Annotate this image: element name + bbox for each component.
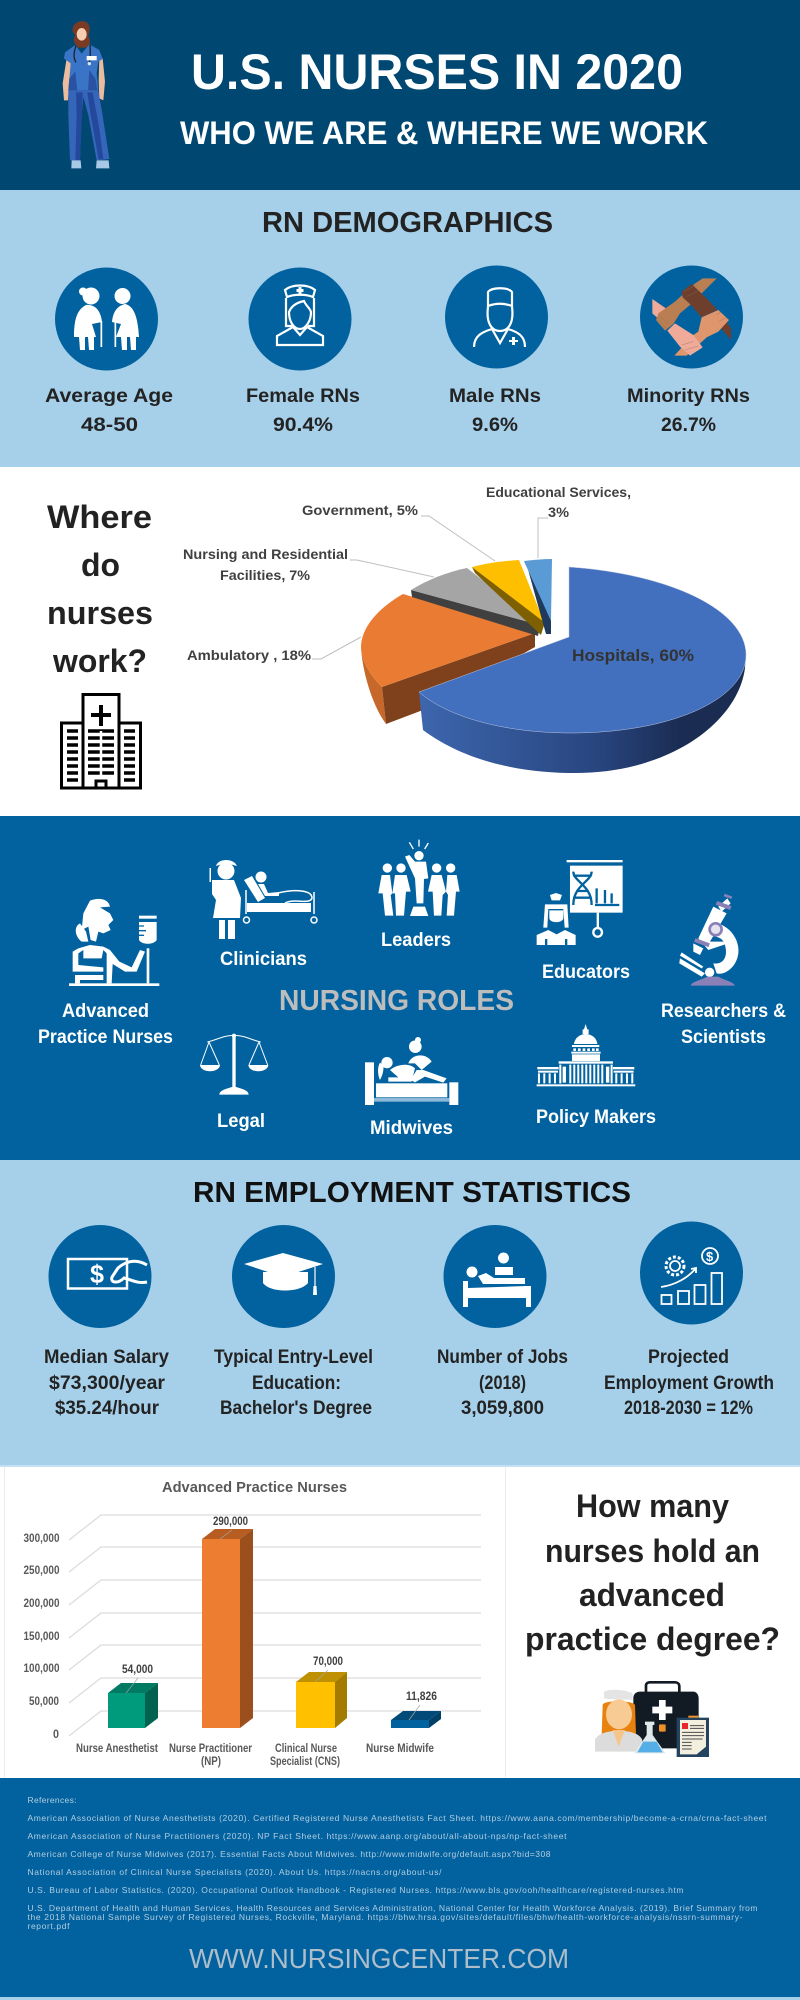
heading: RN DEMOGRAPHICS bbox=[262, 207, 553, 239]
leader lines bbox=[312, 516, 548, 659]
pie chart bbox=[183, 484, 746, 773]
stat: projected growth bbox=[604, 1347, 774, 1419]
title: U.S. NURSES IN 2020 bbox=[191, 44, 683, 100]
heading: advanced practice degree question bbox=[525, 1488, 780, 1657]
x axis labels: Nurse Practitioner bbox=[169, 1741, 252, 1755]
subtitle: WHO WE ARE & WHERE WE WORK bbox=[180, 115, 708, 151]
bar: nurse anesthetist: 54,000 bbox=[122, 1662, 153, 1676]
role: advanced practice nurses: Practice Nurses bbox=[38, 1027, 173, 1048]
bar: nurse anesthetist bbox=[108, 1662, 158, 1728]
x axis labels: (NP) bbox=[201, 1754, 221, 1768]
bar: nurse practitioner bbox=[202, 1514, 253, 1728]
icon: female nurse bbox=[248, 268, 352, 370]
stat: projected growth: Employment Growth bbox=[604, 1373, 774, 1394]
references list: U.S. Department of Health and Human Services, Health Resources and Services Administration, National Center for Health Workforce Analysis. (2019). Brief Summary from bbox=[28, 1903, 757, 1913]
heading: NURSING ROLES bbox=[279, 985, 514, 1017]
role: researchers and scientists: Researchers & bbox=[661, 1001, 786, 1022]
label: minority RNs bbox=[627, 386, 750, 436]
slice: ambulatory bbox=[361, 594, 535, 724]
heading: do bbox=[81, 547, 120, 583]
role: leaders: Leaders bbox=[381, 930, 451, 951]
label: educational services: Educational Services, bbox=[486, 484, 631, 500]
heading: nurses bbox=[47, 595, 153, 631]
icon: nurse with medical kit bbox=[595, 1682, 709, 1757]
label: average age: 48-50 bbox=[81, 415, 138, 436]
heading: Where bbox=[47, 499, 152, 535]
role: legal: Legal bbox=[217, 1111, 265, 1132]
icon: nurse with IV bbox=[69, 899, 159, 986]
role: researchers and scientists: Scientists bbox=[681, 1027, 766, 1048]
y axis: 150,000 bbox=[24, 1629, 60, 1643]
stat: median salary: Median Salary bbox=[44, 1347, 169, 1368]
label: minority RNs: Minority RNs bbox=[627, 386, 750, 407]
role: advanced practice nurses bbox=[38, 899, 173, 1048]
chart title: Advanced Practice Nurses bbox=[162, 1479, 347, 1496]
label: nursing and residential: Nursing and Residential bbox=[183, 546, 348, 562]
label: ambulatory: Ambulatory , 18% bbox=[187, 647, 312, 663]
panel: RN demographics bbox=[0, 190, 800, 467]
icon: salary bbox=[48, 1225, 152, 1328]
stat: entry-level education: Typical Entry-Level bbox=[214, 1347, 373, 1368]
role: researchers and scientists bbox=[661, 894, 786, 1048]
references list: References: bbox=[28, 1795, 76, 1805]
icon: nurse figure bbox=[63, 21, 109, 168]
stat: projected growth: 2018-2030 = 12% bbox=[624, 1398, 753, 1419]
bar: clinical nurse specialist: 70,000 bbox=[313, 1654, 343, 1668]
heading: advanced practice degree question: nurses hold an bbox=[545, 1533, 760, 1569]
icon: growth chart: $ bbox=[706, 1249, 714, 1264]
references list: report.pdf bbox=[28, 1921, 70, 1931]
x axis labels: Specialist (CNS) bbox=[270, 1754, 340, 1768]
references list: American Association of Nurse Practitioners (2020). NP Fact Sheet. https://www.aanp.org/about/all-about-nps/np-fact-sheet bbox=[28, 1831, 567, 1841]
slice: government bbox=[472, 560, 545, 635]
stat: entry-level education bbox=[214, 1347, 373, 1419]
icon: male nurse bbox=[445, 266, 548, 368]
website: WWW.NURSINGCENTER.COM bbox=[189, 1943, 569, 1974]
label: educational services: 3% bbox=[548, 504, 570, 520]
label: nursing and residential bbox=[183, 546, 348, 583]
role: midwives bbox=[365, 1037, 458, 1139]
label: male RNs bbox=[449, 386, 541, 436]
stat: median salary bbox=[44, 1347, 169, 1419]
bar: nurse midwife bbox=[391, 1689, 441, 1728]
icon: graduation cap bbox=[232, 1225, 335, 1328]
icon: midwife and patient bbox=[365, 1037, 458, 1105]
references list: American Association of Nurse Anesthetists (2020). Certified Registered Nurse Anesthetists Fact Sheet. https://www.aana.com/membership/become-a-crna/crna-fact-sheet bbox=[28, 1813, 767, 1823]
y axis: 250,000 bbox=[24, 1563, 60, 1577]
panel: references footer bbox=[0, 1778, 800, 2000]
panel: RN employment statistics bbox=[0, 1160, 800, 1465]
stat: number of jobs: Number of Jobs bbox=[437, 1347, 568, 1368]
references list bbox=[28, 1795, 767, 1931]
role: policy makers: Policy Makers bbox=[536, 1107, 656, 1128]
icon: leader group bbox=[378, 840, 460, 916]
stat: entry-level education: Education: bbox=[252, 1373, 341, 1394]
bar: nurse practitioner: 290,000 bbox=[213, 1514, 248, 1528]
stat: number of jobs: 3,059,800 bbox=[461, 1398, 544, 1419]
panel: where do nurses work bbox=[0, 467, 800, 816]
stat: projected growth: Projected bbox=[648, 1347, 729, 1368]
icon: nurse with patient bbox=[210, 860, 311, 939]
icon: educator with board bbox=[537, 860, 623, 945]
label: government: Government, 5% bbox=[302, 502, 419, 518]
role: educators: Educators bbox=[542, 962, 630, 983]
bar: clinical nurse specialist bbox=[296, 1654, 347, 1728]
bar: nurse midwife: 11,826 bbox=[406, 1689, 437, 1703]
heading bbox=[47, 499, 153, 679]
y axis: 200,000 bbox=[24, 1596, 60, 1610]
references list: the 2018 National Sample Survey of Registered Nurses, Rockville, Maryland. https://bhw.hrsa.gov/sites/default/files/bhw/health-workforce-analysis/nssrn-summary- bbox=[28, 1912, 743, 1922]
references list: National Association of Clinical Nurse Specialists (2020). About Us. https://nacns.org/about-us/ bbox=[28, 1867, 442, 1877]
y axis: 100,000 bbox=[24, 1661, 60, 1675]
x axis labels: Nurse Anesthetist bbox=[76, 1741, 158, 1755]
label: female RNs bbox=[246, 386, 360, 436]
slice: nursing and residential bbox=[411, 568, 540, 636]
icon: salary: $ bbox=[90, 1259, 105, 1289]
label: male RNs: 9.6% bbox=[472, 415, 518, 436]
stat: number of jobs: (2018) bbox=[479, 1373, 526, 1394]
panel: advanced practice nurses bbox=[0, 1465, 800, 1778]
heading: advanced practice degree question: How many bbox=[576, 1488, 729, 1524]
heading: advanced practice degree question: advanced bbox=[579, 1577, 725, 1613]
label: hospitals: Hospitals, 60% bbox=[572, 646, 694, 665]
role: leaders bbox=[378, 840, 460, 951]
role: policy makers bbox=[536, 1024, 656, 1128]
stat: number of jobs bbox=[437, 1347, 568, 1419]
icon: microscope bbox=[679, 894, 739, 986]
role: educators bbox=[537, 860, 630, 983]
bar chart bbox=[24, 1479, 481, 1768]
references list: U.S. Bureau of Labor Statistics. (2020). Occupational Outlook Handbook - Registered Nurses. https://www.bls.gov/ooh/healthcare/registered-nurses.htm bbox=[28, 1885, 684, 1895]
icon: joined hands bbox=[640, 266, 743, 368]
icon: elderly couple bbox=[55, 268, 158, 370]
role: clinicians bbox=[210, 860, 317, 970]
label: nursing and residential: Facilities, 7% bbox=[220, 567, 311, 583]
role: advanced practice nurses: Advanced bbox=[62, 1001, 149, 1022]
references list: American College of Nurse Midwives (2017). Essential Facts About Midwives. http://www.midwife.org/default.aspx?bid=308 bbox=[28, 1849, 551, 1859]
label: average age bbox=[45, 386, 173, 436]
x axis labels: Nurse Midwife bbox=[366, 1741, 434, 1755]
stat: entry-level education: Bachelor's Degree bbox=[220, 1398, 372, 1419]
label: female RNs: Female RNs bbox=[246, 386, 360, 407]
y axis: 0 bbox=[53, 1727, 59, 1741]
panel: header bbox=[0, 0, 800, 190]
role: midwives: Midwives bbox=[370, 1118, 453, 1139]
stat: median salary: $73,300/year bbox=[49, 1373, 166, 1394]
y axis: 300,000 bbox=[24, 1531, 60, 1545]
heading: work? bbox=[52, 643, 147, 679]
icon: patient in bed bbox=[444, 1225, 546, 1328]
y axis bbox=[24, 1531, 60, 1741]
slice: educational services bbox=[524, 559, 552, 634]
icon: scales of justice bbox=[200, 1034, 268, 1095]
label: average age: Average Age bbox=[45, 386, 173, 407]
y axis: 50,000 bbox=[29, 1694, 59, 1708]
role: clinicians: Clinicians bbox=[220, 949, 307, 970]
slice: hospitals bbox=[419, 567, 746, 773]
x axis labels: Clinical Nurse bbox=[275, 1741, 337, 1755]
stat: median salary: $35.24/hour bbox=[55, 1398, 160, 1419]
heading: RN EMPLOYMENT STATISTICS bbox=[193, 1177, 631, 1209]
label: educational services bbox=[486, 484, 631, 520]
role: legal bbox=[200, 1034, 268, 1132]
panel: nursing roles bbox=[0, 816, 800, 1160]
icon: capitol building bbox=[537, 1024, 635, 1086]
label: female RNs: 90.4% bbox=[273, 415, 333, 436]
icon: growth chart bbox=[640, 1222, 743, 1324]
label: minority RNs: 26.7% bbox=[661, 415, 716, 436]
heading: advanced practice degree question: practice degree? bbox=[525, 1621, 780, 1657]
label: male RNs: Male RNs bbox=[449, 386, 541, 407]
x axis labels bbox=[76, 1741, 434, 1768]
icon: hospital bbox=[62, 694, 140, 788]
